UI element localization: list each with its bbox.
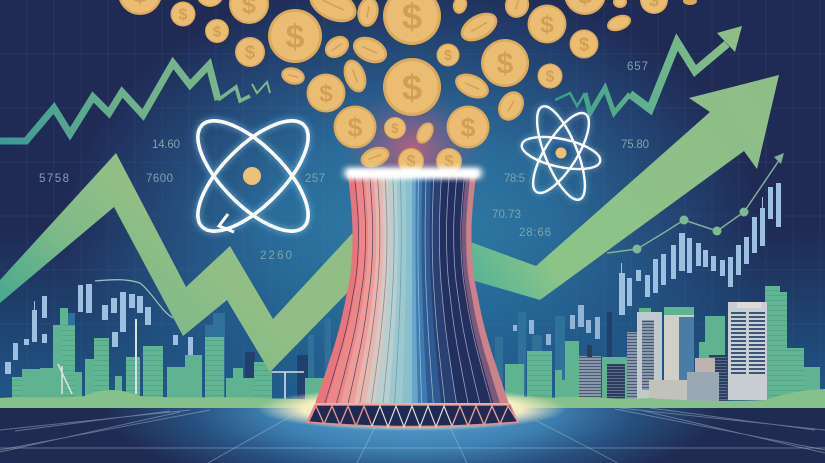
candlestick chart: right upper [619, 183, 781, 315]
coins [118, 0, 697, 174]
tilted coin [605, 12, 633, 34]
city: right green buildings [505, 286, 820, 402]
candlestick chart: right lower [513, 305, 600, 345]
coin [528, 4, 566, 43]
coin: $ [444, 48, 452, 64]
coin: $ [213, 23, 222, 40]
coin: $ [245, 42, 256, 63]
city: left buildings [12, 308, 325, 402]
coin: $ [179, 6, 188, 24]
coin [268, 9, 322, 63]
tower ribs [325, 176, 492, 404]
candlestick chart: left [5, 284, 193, 374]
tilted coin [413, 119, 437, 147]
number: 5758 [39, 173, 69, 185]
tower left half [315, 176, 412, 404]
number: 70.73 [492, 209, 521, 221]
big green arrow: right segment with head [465, 75, 779, 300]
coin [235, 37, 265, 67]
big green arrow: left segment [0, 153, 360, 372]
coin [205, 19, 229, 43]
coin [436, 44, 460, 66]
number: 7600 [146, 173, 173, 185]
number: 2260 [260, 250, 292, 262]
coin [446, 106, 490, 148]
coin [538, 64, 562, 88]
number: 28:66 [519, 227, 551, 239]
coin [118, 0, 162, 15]
distant blue buildings [67, 312, 612, 400]
coin: $ [402, 67, 422, 108]
atom icon: right [519, 101, 603, 205]
coin [564, 0, 606, 15]
tilted coin [321, 31, 353, 63]
tilted coin [493, 87, 529, 125]
coin: $ [286, 18, 305, 56]
number: 657 [627, 61, 648, 73]
coin [383, 58, 441, 116]
tower rim glow [343, 167, 483, 179]
tilted coin [279, 65, 307, 87]
coin: $ [319, 81, 333, 108]
thin trend line top left [0, 63, 270, 141]
tilted coin [355, 0, 381, 29]
coin: $ [444, 153, 454, 171]
coin: $ [348, 112, 363, 142]
cooling tower [307, 167, 518, 427]
tilted coin [613, 0, 627, 8]
coin [640, 0, 668, 14]
tower right half [412, 176, 509, 404]
node line chart [607, 153, 784, 254]
trend line: left [95, 280, 173, 318]
coin: $ [546, 68, 555, 86]
tilted coin [358, 143, 392, 171]
coin [170, 2, 196, 26]
tilted coin [456, 7, 502, 47]
coin: $ [406, 153, 416, 171]
number: 14.60 [152, 139, 180, 151]
tilted coin [304, 0, 362, 29]
wind turbines and poles: left [58, 319, 304, 400]
coin: $ [540, 12, 554, 39]
coin [306, 74, 346, 112]
coin [570, 30, 598, 58]
coin: $ [391, 121, 399, 136]
coin [481, 39, 529, 87]
tilted coin [451, 68, 493, 104]
coin: $ [497, 48, 514, 81]
ground band: left [0, 390, 330, 408]
tilted coin [451, 0, 469, 16]
tilted coin [349, 32, 391, 68]
coin [436, 148, 462, 174]
ground band: right [498, 389, 825, 408]
atom icon: left [181, 104, 325, 248]
city: right towers [579, 302, 767, 402]
tilted coin [339, 56, 371, 96]
trend arrow top right [555, 26, 742, 113]
coin [383, 0, 441, 45]
glow above tower [340, 88, 484, 212]
coin [398, 148, 424, 174]
coin [229, 0, 269, 24]
tower base truss [307, 404, 518, 427]
floor [0, 387, 825, 463]
coin: $ [579, 34, 589, 54]
tilted coin [683, 0, 697, 5]
chart numbers [39, 61, 649, 262]
coin [196, 0, 224, 7]
coin: $ [461, 112, 476, 142]
number: 78:5 [504, 173, 525, 185]
tilted coin [501, 0, 533, 21]
coin [334, 106, 376, 148]
coin [384, 117, 406, 139]
number: 75.80 [621, 139, 649, 151]
number: 257 [305, 173, 325, 185]
